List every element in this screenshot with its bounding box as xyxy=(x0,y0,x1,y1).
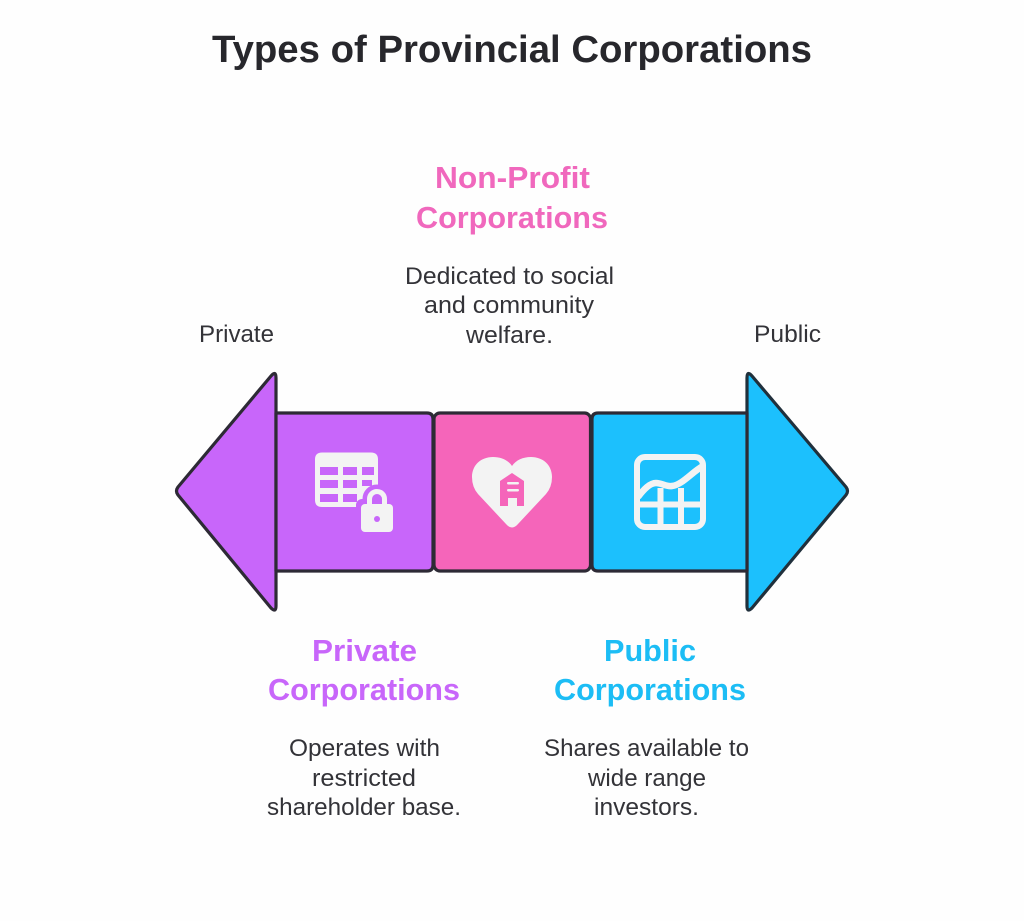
label: private: Private xyxy=(199,321,274,348)
text: non-profit description xyxy=(405,263,614,349)
heading: public corporations: Corporations xyxy=(554,672,746,707)
right arrowhead xyxy=(747,373,848,610)
heading: non-profit corporations xyxy=(416,160,608,235)
text: non-profit description: and community xyxy=(424,292,594,319)
text: private description: shareholder base. xyxy=(267,794,461,821)
heading: non-profit corporations: Corporations xyxy=(416,200,608,235)
label: public: Public xyxy=(754,321,821,348)
text: non-profit description: welfare. xyxy=(465,322,553,349)
heading: public corporations xyxy=(554,633,746,707)
heading: public corporations: Public xyxy=(604,633,696,668)
segment: non-profit xyxy=(434,413,590,571)
arrow diagram xyxy=(176,373,848,610)
heading: non-profit corporations: Non-Profit xyxy=(435,160,590,195)
icon: growth chart table xyxy=(637,457,703,527)
text: private description xyxy=(267,735,461,821)
text: non-profit description: Dedicated to social xyxy=(405,263,614,290)
text: public description xyxy=(544,735,749,821)
segment: private xyxy=(276,413,433,571)
icon: locked table xyxy=(315,452,398,537)
text: private description: restricted xyxy=(312,765,416,792)
text: private description: Operates with xyxy=(289,735,440,762)
title: Types of Provincial Corporations xyxy=(212,29,812,71)
heading: private corporations: Corporations xyxy=(268,672,460,707)
icon: heart with building xyxy=(472,457,552,528)
heading: private corporations xyxy=(268,633,460,707)
segment: public xyxy=(592,413,747,571)
text: public description: wide range xyxy=(587,765,706,792)
text: public description: Shares available to xyxy=(544,735,749,762)
heading: private corporations: Private xyxy=(312,633,417,668)
text: public description: investors. xyxy=(594,794,699,821)
left arrowhead xyxy=(176,373,276,610)
